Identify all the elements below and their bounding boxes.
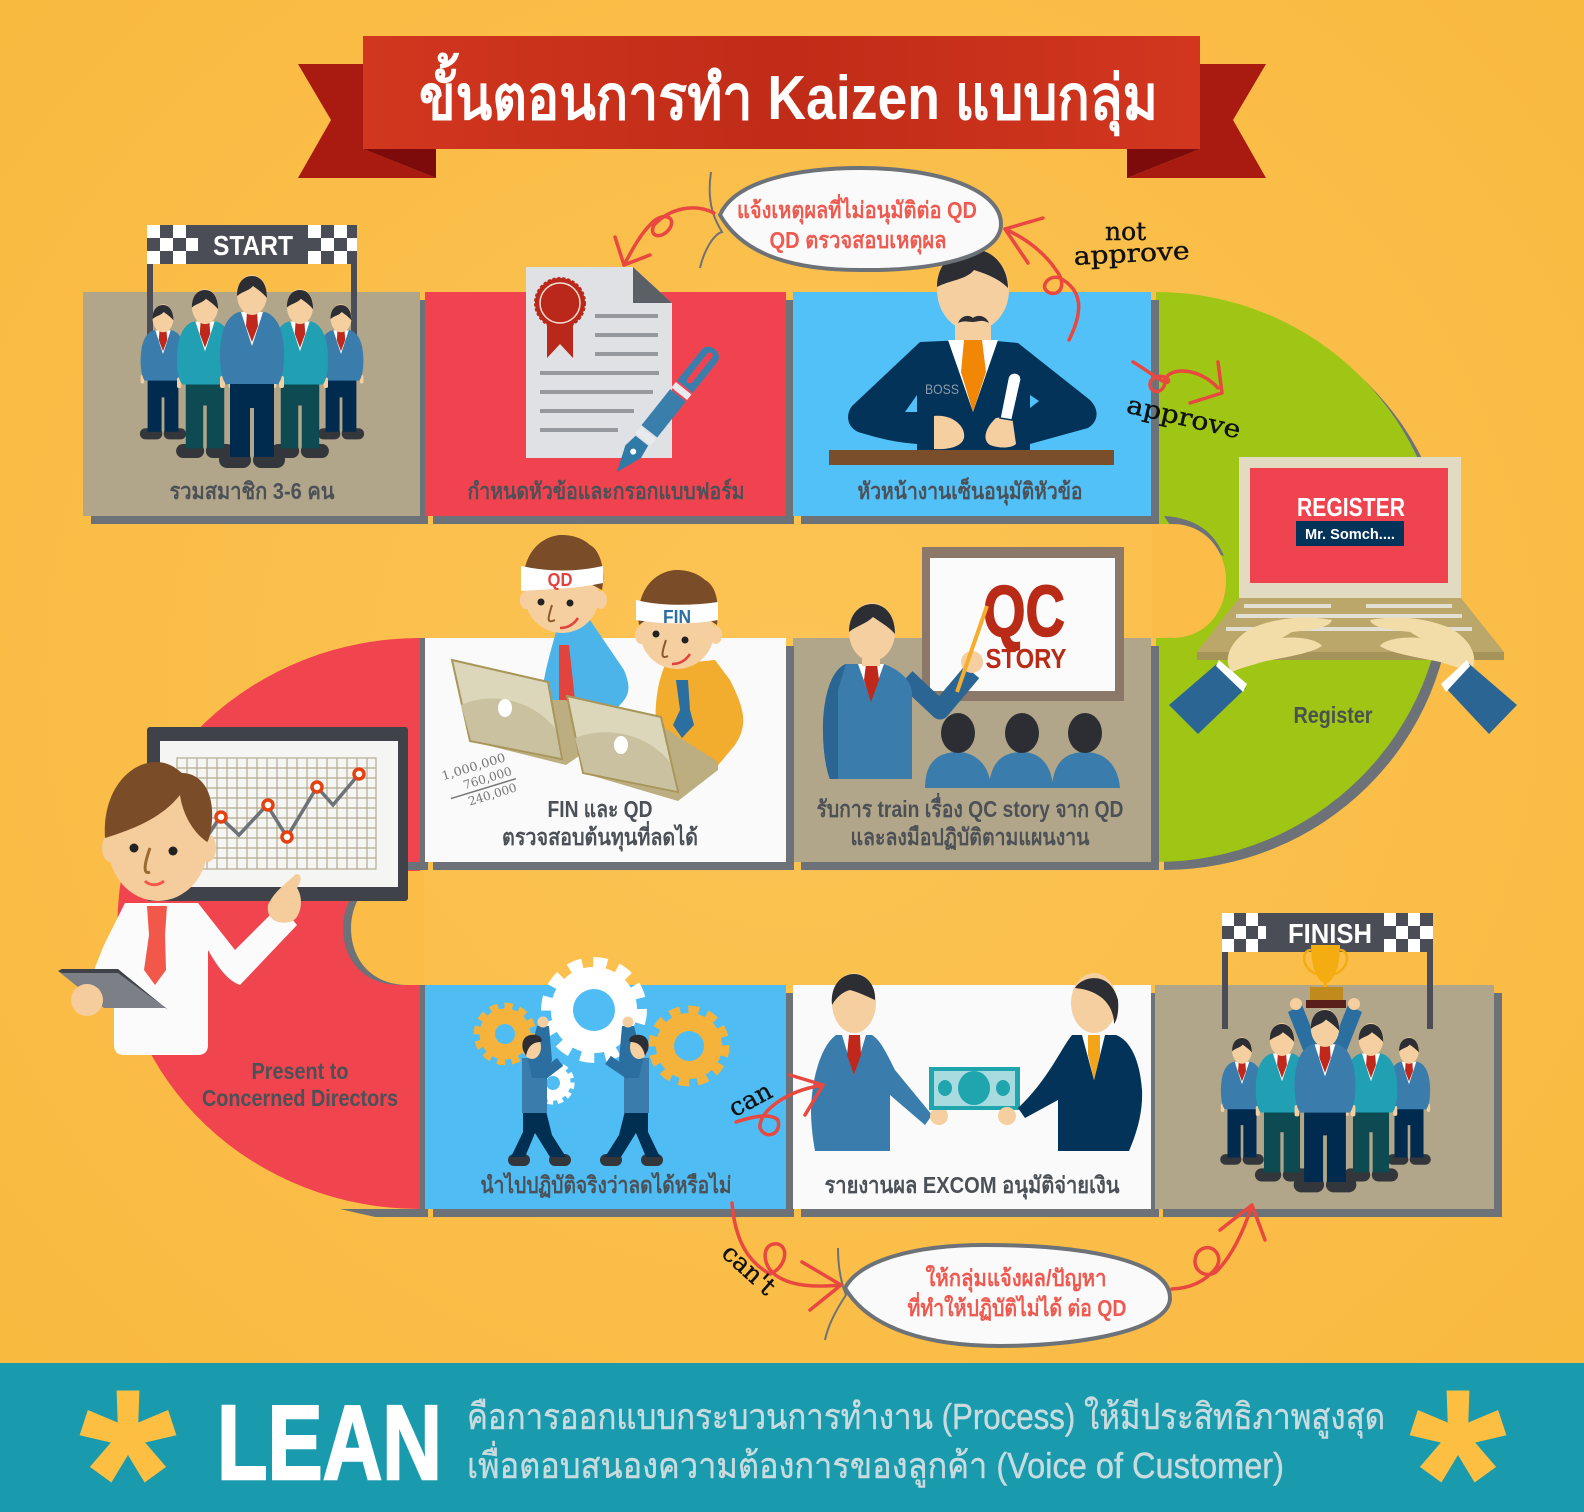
arrow: not approve xyxy=(1005,218,1079,340)
icon: presenter with chart xyxy=(58,727,408,1055)
laptops xyxy=(452,660,718,801)
name field: Mr. Somch.... xyxy=(1305,526,1395,543)
finish-line start banner xyxy=(147,225,357,340)
lean definition: เพื่อตอบสนองความต้องการของลูกค้า (Voice of Customer) xyxy=(467,1441,1284,1488)
handwritten sums xyxy=(440,749,520,814)
lean definition: คือการออกแบบกระบวนการทำงาน (Process) ให้มีประสิทธิภาพสูงสุด xyxy=(467,1396,1385,1439)
FIN person xyxy=(635,570,743,775)
boss label: BOSS xyxy=(925,381,959,397)
caption: นำไปปฏิบัติจริงว่าลดได้หรือไม่ xyxy=(480,1171,732,1198)
caption: หัวหน้างานเซ็นอนุมัติหัวข้อ xyxy=(858,476,1082,506)
label: not approve xyxy=(1073,217,1190,271)
handwritten sums: 240,000 xyxy=(466,780,518,808)
label: not approve: not xyxy=(1105,217,1146,246)
icon: fountain pen xyxy=(609,343,723,478)
lean definition xyxy=(467,1396,1385,1488)
icon: boss at desk xyxy=(829,249,1114,465)
icon: laptop with hands xyxy=(1169,457,1517,734)
icon: document with seal xyxy=(526,267,672,458)
finish banner xyxy=(1222,913,1433,1029)
label: not approve: approve xyxy=(1073,236,1190,271)
icon: right businessman xyxy=(998,973,1142,1151)
icon: left asterisk xyxy=(80,1390,176,1482)
finish label: FINISH xyxy=(1288,918,1372,949)
panel: finish xyxy=(1155,913,1502,1217)
icon: banknote xyxy=(929,1067,1020,1110)
callout: not-approved reason: QD ตรวจสอบเหตุผล xyxy=(770,227,946,255)
label: approve: approve xyxy=(1124,390,1244,444)
QD label: QD xyxy=(548,570,573,590)
QD person xyxy=(520,535,628,735)
caption: รับการ train เรื่อง QC story จาก QD xyxy=(816,792,1124,822)
panel: step 2 define topic and form xyxy=(425,267,794,524)
team of five xyxy=(140,275,364,468)
caption: present to directors xyxy=(202,1058,398,1111)
footer band xyxy=(0,1363,1584,1512)
callout text: แจ้งเหตุผลที่ไม่อนุมัติต่อ QD xyxy=(737,193,977,225)
caption: present to directors: Present to xyxy=(252,1058,348,1084)
arrow: can xyxy=(736,1075,823,1135)
trainer xyxy=(823,603,987,779)
arrow: to finish xyxy=(1172,1205,1265,1289)
title banner xyxy=(298,36,1266,178)
panel: step 6 QC training xyxy=(793,547,1159,870)
panel: register green semicircle xyxy=(1152,292,1452,870)
panel: present red semicircle xyxy=(117,638,428,1217)
FIN label: FIN xyxy=(663,607,691,627)
callout: cannot implement xyxy=(825,1245,1170,1346)
start label: START xyxy=(213,230,293,261)
label: cannot: can't xyxy=(716,1238,782,1301)
icon: right asterisk xyxy=(1410,1390,1506,1482)
winning team xyxy=(1220,998,1431,1192)
arrow: cannot xyxy=(732,1203,841,1310)
QC heading: QC xyxy=(983,572,1065,652)
panel: step 3 boss signs xyxy=(793,249,1159,524)
panel: step 8 report to excom xyxy=(793,973,1159,1217)
arrow: approve xyxy=(1133,362,1222,403)
panel: step 5 cost check xyxy=(425,535,794,870)
icon: left businessman xyxy=(811,973,948,1151)
handwritten sums: 1,000,000 xyxy=(440,750,507,783)
icon: workers lifting gear xyxy=(508,1016,663,1166)
arrow: back to form xyxy=(615,208,714,265)
QC story board xyxy=(922,547,1124,701)
panel: step 7 implementation xyxy=(425,963,794,1217)
caption: present to directors: Concerned Directors xyxy=(202,1085,398,1111)
label: can: can xyxy=(724,1076,777,1123)
panel: step 1 gather members xyxy=(83,225,428,524)
callout text: ให้กลุ่มแจ้งผล/ปัญหา xyxy=(926,1264,1106,1293)
audience xyxy=(925,713,1120,788)
handwritten sums: 760,000 xyxy=(462,764,513,792)
caption: กำหนดหัวข้อและกรอกแบบฟอร์ม xyxy=(468,478,744,504)
panel: step 5 cost check: ตรวจสอบต้นทุนที่ลดได้ xyxy=(502,820,698,852)
chart monitor xyxy=(147,727,408,901)
caption: รายงานผล EXCOM อนุมัติจ่ายเงิน xyxy=(824,1172,1120,1200)
title text: ขั้นตอนการทำ Kaizen แบบกลุ่ม xyxy=(419,52,1158,136)
heading: LEAN: LEAN xyxy=(217,1384,442,1502)
story word: STORY xyxy=(986,643,1067,674)
icon: gears xyxy=(477,963,725,1102)
callout: cannot implement: ที่ทำให้ปฏิบัติไม่ได้ ต่อ QD xyxy=(908,1291,1126,1321)
torso and arms xyxy=(86,903,297,1055)
panel: step 6 QC training: และลงมือปฏิบัติตามแผนงาน xyxy=(850,824,1090,850)
icon: trophy xyxy=(1304,945,1347,1008)
caption: FIN และ QD xyxy=(548,796,652,822)
register label: REGISTER xyxy=(1297,492,1405,522)
callout: not-approved reason xyxy=(700,168,1001,270)
caption: register: Register xyxy=(1294,702,1373,728)
caption: รวมสมาชิก 3-6 คน xyxy=(170,478,335,504)
